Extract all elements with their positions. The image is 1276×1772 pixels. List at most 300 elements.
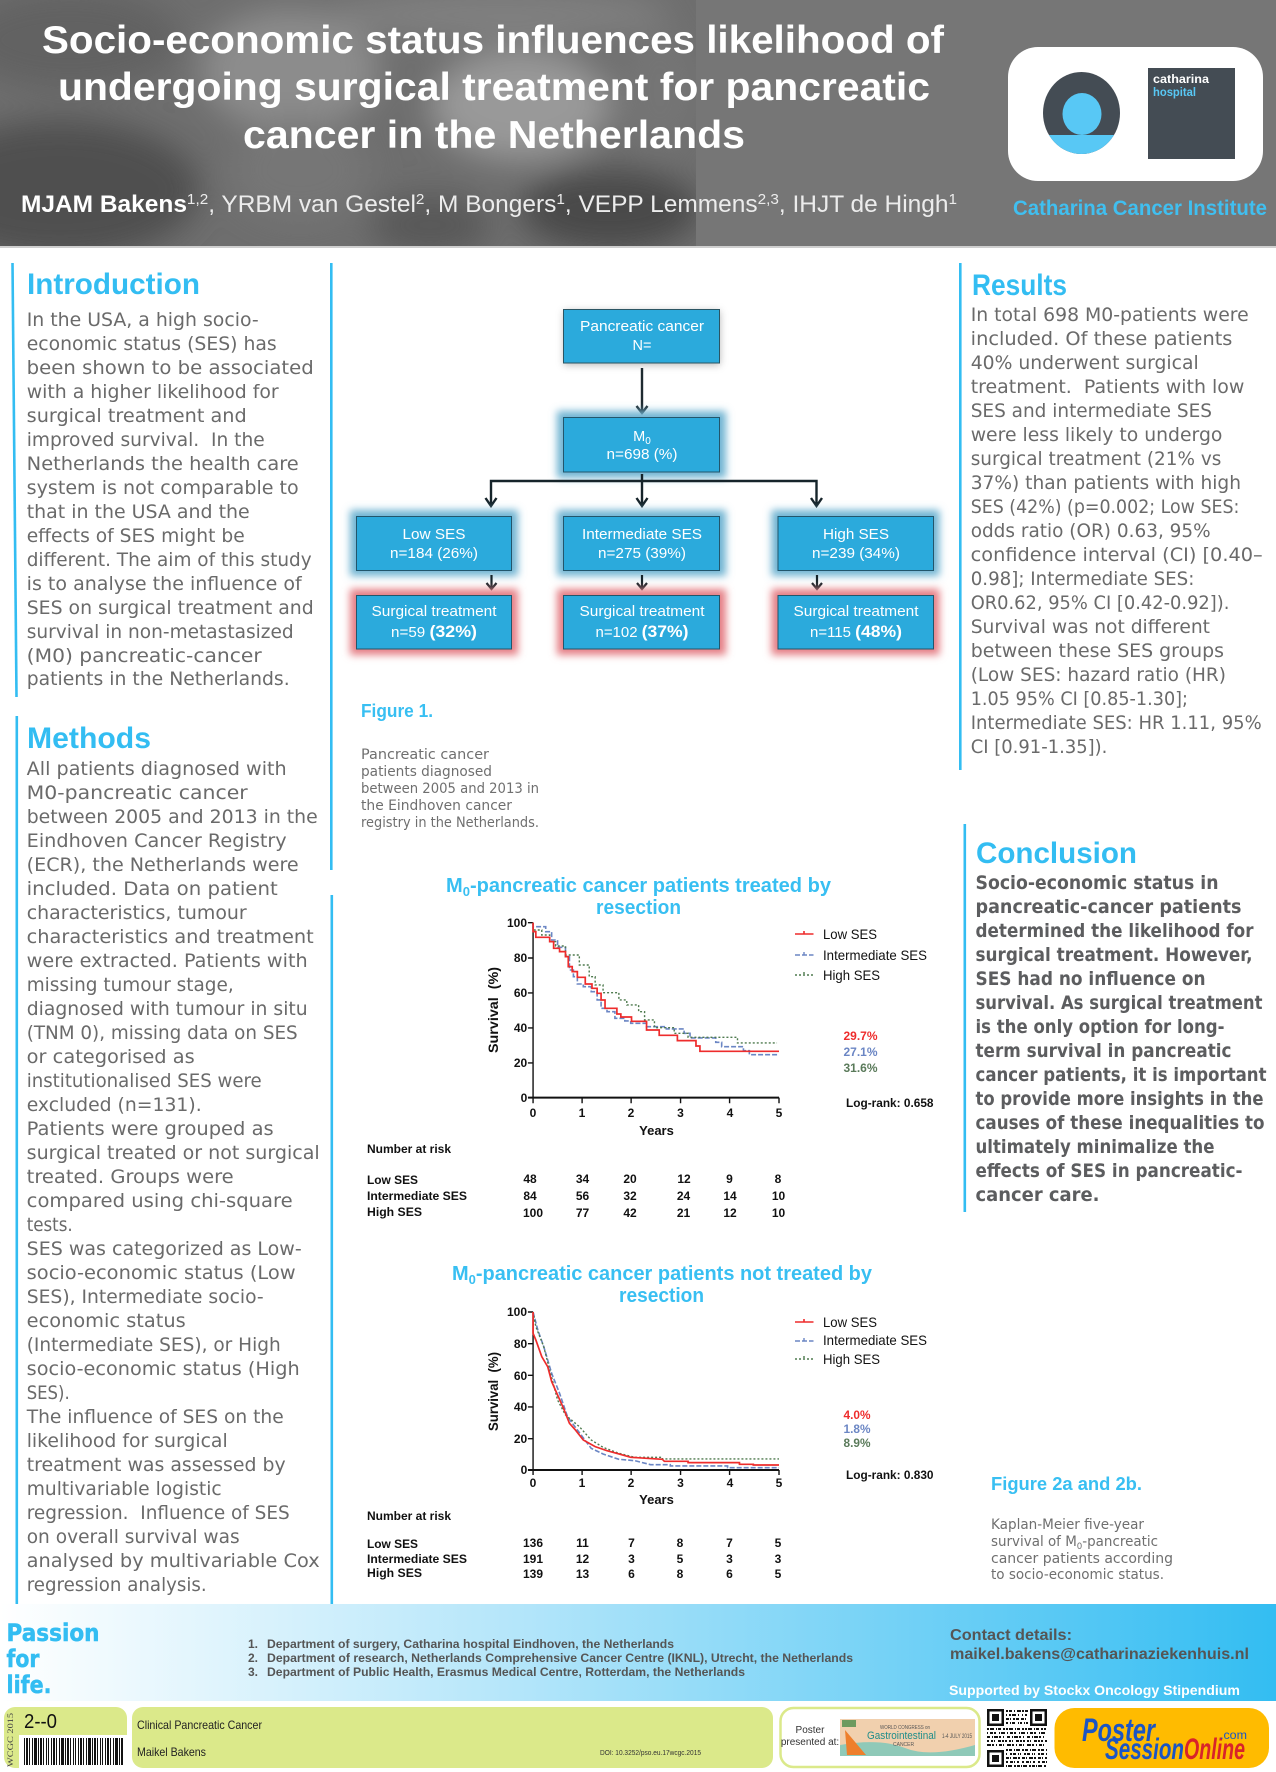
authors: , IHJT de Hingh <box>779 191 948 218</box>
text: methods body: were extracted. Patients with <box>27 950 308 972</box>
text: introduction body: SES on surgical treatment and <box>27 597 314 619</box>
QR code <box>985 1708 1048 1769</box>
number at risk table: 13 <box>576 1567 589 1581</box>
title: undergoing surgical treatment for pancreatic <box>58 66 930 109</box>
box: surgical intermediate SES: Surgical treatment <box>580 604 704 620</box>
text: results body: (Low SES: hazard ratio (HR) <box>971 664 1226 686</box>
poster presented at box: presented at: <box>781 1737 839 1748</box>
y axis labels: 60 <box>514 1369 527 1383</box>
text: introduction body: is to analyse the influence of <box>27 573 303 595</box>
text: methods body: characteristics and treatment <box>27 926 314 948</box>
number at risk table: 21 <box>677 1206 690 1220</box>
number at risk table: Number at risk <box>367 1509 451 1523</box>
box: low SES: n=184 (26%) <box>390 546 478 562</box>
text: introduction body: system is not comparable to <box>27 477 299 499</box>
contact details: maikel.bakens@catharinaziekenhuis.nl <box>950 1646 1249 1663</box>
box: intermediate SES: n=275 (39%) <box>598 546 686 562</box>
contact details: Contact details: <box>950 1627 1072 1644</box>
text: results body: OR0.62, 95% CI [0.42-0.92]). <box>971 592 1229 614</box>
text: results body: were less likely to undergo <box>971 424 1222 446</box>
slogan: life. <box>6 1671 52 1699</box>
text: conclusion body: is the only option for long- <box>976 1016 1224 1038</box>
x axis labels <box>530 1476 783 1507</box>
text: introduction body: In the USA, a high socio- <box>27 309 259 331</box>
poster details box: Maikel Bakens <box>137 1745 206 1759</box>
text: introduction body: that in the USA and the <box>27 501 250 523</box>
text: methods body: SES). <box>27 1382 70 1404</box>
x axis labels: Years <box>639 1492 674 1507</box>
congress banner <box>840 1719 975 1756</box>
sponsor line: Supported by Stockx Oncology Stipendium <box>949 1682 1240 1698</box>
number at risk table: 3 <box>726 1552 733 1566</box>
legend <box>795 1314 927 1367</box>
number at risk table: 8 <box>775 1172 782 1186</box>
text: introduction body: improved survival. In the <box>27 429 265 451</box>
box: pancreatic cancer: N= <box>633 338 651 354</box>
poster details box: Clinical Pancreatic Cancer <box>137 1718 262 1732</box>
text: methods body: treatment was assessed by <box>27 1454 286 1476</box>
y axis labels: 80 <box>514 951 527 965</box>
number at risk table <box>367 1509 782 1581</box>
heading: introduction: Introduction <box>27 268 200 301</box>
box: surgical intermediate SES <box>557 589 726 655</box>
PosterSessionOnline logo <box>1054 1708 1269 1768</box>
number at risk table: 12 <box>576 1552 589 1566</box>
axes and curves <box>528 1312 779 1475</box>
y axis labels: 60 <box>514 986 527 1000</box>
number at risk table: 84 <box>523 1189 537 1203</box>
text: results body: Survival was not different <box>971 616 1210 638</box>
box: pancreatic cancer <box>564 310 720 365</box>
box: surgical intermediate SES: n=102 (37%) <box>596 622 688 641</box>
title: Socio-economic status influences likelihood of <box>42 19 945 62</box>
y axis labels: 0 <box>521 1463 528 1477</box>
text: methods body: socio-economic status (Low <box>27 1262 296 1284</box>
box: surgical low SES: n=59 (32%) <box>391 622 477 641</box>
chart 2: survival not treated by resection <box>367 1263 934 1581</box>
x axis labels: 4 <box>727 1476 734 1490</box>
poster details box: DOI: 10.3252/pso.eu.17wcgc.2015 <box>600 1748 701 1757</box>
number at risk table: 14 <box>723 1189 737 1203</box>
chart title: resection <box>619 1285 704 1307</box>
caption: figure 1: Pancreatic cancer <box>361 747 489 763</box>
number at risk table: 48 <box>523 1172 537 1186</box>
box: M0 <box>557 411 726 478</box>
text: methods body: between 2005 and 2013 in the <box>27 806 318 828</box>
congress banner: WORLD CONGRESS on <box>880 1725 930 1731</box>
text: methods body: SES was categorized as Low- <box>27 1238 302 1260</box>
x axis labels <box>530 1106 783 1138</box>
caption: figure 1: Figure 1. <box>361 701 433 721</box>
affiliations: 3. <box>248 1665 258 1679</box>
number at risk table: 10 <box>772 1206 785 1220</box>
number at risk table: Low SES <box>367 1537 418 1551</box>
box: surgical low SES <box>350 589 518 655</box>
x axis labels: 3 <box>677 1476 684 1490</box>
text: methods body: regression analysis. <box>27 1574 207 1596</box>
affiliations <box>248 1637 853 1679</box>
legend: Intermediate SES <box>823 947 927 963</box>
panel: methods <box>16 716 320 1604</box>
y axis labels <box>485 916 528 1105</box>
footer band <box>0 1604 1276 1701</box>
chart title: M <box>452 1263 469 1285</box>
authors: , M Bongers <box>424 191 556 218</box>
x axis labels: 5 <box>776 1476 783 1490</box>
text: methods body: tests. <box>27 1214 73 1236</box>
caption: figure 2: Kaplan-Meier five-year <box>991 1517 1144 1533</box>
caption: figure 1: between 2005 and 2013 in <box>361 781 539 797</box>
text: methods body: diagnosed with tumour in situ <box>27 998 308 1020</box>
text: results body: 37%) than patients with high <box>971 472 1241 494</box>
poster presented at box: Poster <box>796 1725 825 1736</box>
PosterSessionOnline logo: Online <box>1184 1733 1245 1766</box>
number at risk table: High SES <box>367 1205 422 1219</box>
text: methods body: regression. Influence of SES <box>27 1502 290 1524</box>
heading: methods: Methods <box>27 722 151 755</box>
number at risk table: Number at risk <box>367 1142 451 1156</box>
number at risk table: 12 <box>723 1206 737 1220</box>
conference label: WCGC 2015 <box>5 1713 15 1767</box>
text: introduction body: different. The aim of this study <box>27 549 312 571</box>
authors: 1 <box>948 191 957 208</box>
text: methods body: included. Data on patient <box>27 878 278 900</box>
text: conclusion body: effects of SES in pancreatic- <box>976 1160 1242 1182</box>
chart 1: survival treated by resection <box>367 875 934 1220</box>
number at risk table: 5 <box>775 1567 782 1581</box>
text: results body: confidence interval (CI) [0.40– <box>971 544 1263 566</box>
text: results body: SES and intermediate SES <box>971 400 1212 422</box>
caption: figure 2: cancer patients according <box>991 1551 1173 1567</box>
text: results body: 1.05 95% CI [0.85-1.30]; <box>971 688 1188 710</box>
text: methods body: characteristics, tumour <box>27 902 247 924</box>
authors: 2,3 <box>758 191 779 208</box>
five-year survival percentages: 29.7% <box>844 1029 878 1043</box>
box: surgical high SES: n=115 (48%) <box>810 622 902 641</box>
number at risk table: 56 <box>576 1189 589 1203</box>
x axis labels: 0 <box>530 1476 537 1490</box>
x axis labels: 0 <box>530 1106 537 1120</box>
icon: logo mark <box>1043 72 1120 154</box>
box: low SES <box>350 510 518 576</box>
panel: conclusion <box>964 824 1266 1212</box>
x axis labels: 5 <box>776 1106 783 1120</box>
text: methods body: on overall survival was <box>27 1526 240 1548</box>
PosterSessionOnline logo: .com <box>1220 1728 1247 1742</box>
box: surgical low SES: Surgical treatment <box>372 604 496 620</box>
text: conclusion body: pancreatic-cancer patients <box>976 896 1242 918</box>
flowchart <box>350 310 940 655</box>
number at risk table: 6 <box>628 1567 635 1581</box>
text: results body: 0.98]; Intermediate SES: <box>971 568 1194 590</box>
congress banner: CANCER <box>893 1742 915 1748</box>
title <box>42 19 945 157</box>
chart title: -pancreatic cancer patients not treated by <box>476 1263 873 1285</box>
number at risk table: 100 <box>523 1206 543 1220</box>
contact details <box>950 1627 1249 1663</box>
y axis labels: Survival (%) <box>485 967 501 1053</box>
caption: figure 2: survival of M <box>991 1534 1080 1550</box>
text: conclusion body: ultimately minimalize the <box>976 1136 1214 1158</box>
legend: Low SES <box>823 1314 877 1330</box>
y axis labels: 40 <box>514 1400 527 1414</box>
text: methods body: treated. Groups were <box>27 1166 234 1188</box>
x axis labels: 2 <box>628 1106 635 1120</box>
heading: results: Results <box>972 269 1067 302</box>
authors: 1,2 <box>187 191 208 208</box>
caption: figure 2: -pancreatic <box>1082 1534 1158 1550</box>
slogan: Passion <box>6 1619 100 1647</box>
number at risk table: 8 <box>677 1536 684 1550</box>
affiliations: Department of Public Health, Erasmus Medical Centre, Rotterdam, the Netherlands <box>267 1665 745 1679</box>
number at risk table: 7 <box>726 1536 733 1550</box>
box: surgical high SES: Surgical treatment <box>794 604 918 620</box>
text: results body <box>971 304 1263 758</box>
authors: , YRBM van Gestel <box>208 191 416 218</box>
caption: figure 1: registry in the Netherlands. <box>361 815 539 831</box>
text: methods body: institutionalised SES were <box>27 1070 262 1092</box>
x axis labels: Years <box>639 1123 674 1138</box>
slogan: for <box>6 1645 40 1673</box>
PosterSessionOnline logo: Poster <box>1082 1712 1156 1748</box>
poster id box <box>4 1707 127 1768</box>
y axis labels: 100 <box>507 1305 527 1319</box>
text: methods body: compared using chi-square <box>27 1190 293 1212</box>
five-year survival percentages <box>844 1029 878 1075</box>
text: methods body: (ECR), the Netherlands were <box>27 854 299 876</box>
text: methods body <box>26 758 320 1596</box>
text: methods body: SES), Intermediate socio- <box>27 1286 264 1308</box>
caption: figure 2: Figure 2a and 2b. <box>991 1474 1142 1494</box>
number at risk table: 20 <box>623 1172 637 1186</box>
number at risk table: 10 <box>772 1189 785 1203</box>
text: methods body: missing tumour stage, <box>27 974 234 996</box>
authors: 1 <box>556 191 565 208</box>
text: introduction body: patients in the Netherlands. <box>27 668 290 690</box>
chart title <box>446 875 832 919</box>
text: results body: Intermediate SES: HR 1.11, 95% <box>971 712 1262 734</box>
number at risk table: 3 <box>628 1552 635 1566</box>
text: methods body: The influence of SES on the <box>26 1406 284 1428</box>
y axis labels: 0 <box>521 1091 528 1105</box>
logo wordmark block: catharina <box>1153 72 1209 86</box>
number at risk table: 42 <box>623 1206 637 1220</box>
text: methods body: M0-pancreatic cancer <box>27 782 248 804</box>
text: methods body: All patients diagnosed with <box>27 758 287 780</box>
text: conclusion body: Socio-economic status in <box>976 872 1218 894</box>
number at risk table: 5 <box>775 1536 782 1550</box>
number at risk table: 12 <box>677 1172 691 1186</box>
number at risk table: 139 <box>523 1567 543 1581</box>
box: M0: n=698 (%) <box>606 447 678 463</box>
number at risk table: High SES <box>367 1566 422 1580</box>
text: results body: between these SES groups <box>971 640 1224 662</box>
text: methods body: multivariable logistic <box>27 1478 222 1500</box>
affiliations: 1. <box>248 1637 258 1651</box>
slogan <box>6 1619 100 1699</box>
caption: figure 1: patients diagnosed <box>361 764 492 780</box>
y axis labels: 100 <box>507 916 527 930</box>
five-year survival percentages <box>844 1408 871 1450</box>
panel: results <box>959 263 1263 770</box>
text: results body: included. Of these patients <box>971 328 1232 350</box>
text: methods body: or categorised as <box>27 1046 195 1068</box>
text: introduction body: Netherlands the health care <box>27 453 299 475</box>
congress banner: Gastrointestinal <box>867 1730 936 1742</box>
number at risk table: 24 <box>677 1189 690 1203</box>
text: introduction body: economic status (SES) has <box>27 333 277 355</box>
box: high SES: High SES <box>823 527 889 543</box>
caption: figure 2: to socio-economic status. <box>991 1567 1164 1583</box>
logo wordmark block <box>1148 68 1235 159</box>
text: methods body: (TNM 0), missing data on SES <box>27 1022 298 1044</box>
text: conclusion body <box>976 872 1266 1206</box>
title: cancer in the Netherlands <box>243 114 745 157</box>
text: methods body: socio-economic status (High <box>27 1358 300 1380</box>
number at risk table: 77 <box>576 1206 589 1220</box>
legend: High SES <box>823 967 880 983</box>
chart title: 0 <box>463 884 470 899</box>
y axis labels: 40 <box>514 1021 527 1035</box>
five-year survival percentages: 8.9% <box>844 1436 871 1450</box>
x axis labels: 4 <box>727 1106 734 1120</box>
text: methods body: Patients were grouped as <box>27 1118 274 1140</box>
text: methods body: Eindhoven Cancer Registry <box>27 830 287 852</box>
box: M0: 0 <box>645 436 651 447</box>
text: introduction body: with a higher likelihood for <box>27 381 279 403</box>
arrows: branch to SES groups <box>486 474 822 506</box>
text: results body: SES (42%) (p=0.002; Low SES: <box>971 496 1239 518</box>
legend: High SES <box>823 1351 880 1367</box>
text: methods body: surgical treated or not surgical <box>27 1142 320 1164</box>
barcode <box>24 1738 124 1765</box>
x axis labels: 1 <box>579 1106 586 1120</box>
number at risk table: Intermediate SES <box>367 1552 467 1566</box>
arrows: to surgical treatment <box>486 575 822 589</box>
five-year survival percentages: 31.6% <box>844 1061 878 1075</box>
y axis labels <box>485 1305 528 1477</box>
text: methods body: excluded (n=131). <box>27 1094 202 1116</box>
text: introduction body <box>27 309 314 690</box>
poster presented at box <box>780 1708 980 1767</box>
text: introduction body: survival in non-metastasized <box>27 621 294 643</box>
five-year survival percentages: 4.0% <box>844 1408 871 1422</box>
PosterSessionOnline logo: Session <box>1105 1733 1184 1766</box>
hospital logo <box>1008 47 1263 181</box>
number at risk table: 32 <box>623 1189 637 1203</box>
affiliations: Department of surgery, Catharina hospital Eindhoven, the Netherlands <box>267 1637 674 1651</box>
number at risk table <box>367 1142 785 1220</box>
five-year survival percentages: 1.8% <box>844 1422 871 1436</box>
legend: Low SES <box>823 926 877 942</box>
arrow: to M0 <box>636 368 648 413</box>
box: pancreatic cancer: Pancreatic cancer <box>580 319 704 335</box>
text: methods body: analysed by multivariable Cox <box>27 1550 320 1572</box>
chart title: resection <box>596 897 681 919</box>
box: M0: M <box>633 429 645 445</box>
text: results body: CI [0.91-1.35]). <box>971 736 1107 758</box>
log-rank: Log-rank: 0.830 <box>846 1468 934 1482</box>
text: introduction body: (M0) pancreatic-cancer <box>27 645 262 667</box>
number at risk table: 11 <box>576 1536 589 1550</box>
poster details box <box>132 1707 773 1768</box>
logo wordmark block: hospital <box>1153 85 1196 99</box>
heading: conclusion: Conclusion <box>976 837 1137 870</box>
caption: figure 2 <box>991 1474 1173 1583</box>
affiliations: Department of research, Netherlands Comprehensive Cancer Centre (IKNL), Utrecht, the Netherlands <box>267 1651 853 1665</box>
text: conclusion body: SES had no influence on <box>976 968 1206 990</box>
box: high SES <box>772 510 940 576</box>
number at risk table: 5 <box>677 1552 684 1566</box>
text: results body: odds ratio (OR) 0.63, 95% <box>971 520 1211 542</box>
log-rank: Log-rank: 0.658 <box>846 1096 934 1110</box>
text: introduction body: effects of SES might be <box>27 525 245 547</box>
chart title: 0 <box>469 1272 476 1287</box>
legend: Intermediate SES <box>823 1332 927 1348</box>
authors: 2 <box>416 191 424 208</box>
text: results body: 40% underwent surgical <box>971 352 1199 374</box>
text: results body: In total 698 M0-patients were <box>971 304 1249 326</box>
y axis labels: 20 <box>514 1056 527 1070</box>
caption: figure 1: the Eindhoven cancer <box>361 798 512 814</box>
header background photo <box>0 0 700 260</box>
x axis labels: 1 <box>579 1476 586 1490</box>
affiliations: 2. <box>248 1651 258 1665</box>
institute name: Catharina Cancer Institute <box>1013 197 1267 220</box>
congress banner: 1-4 JULY 2015 <box>942 1734 972 1740</box>
authors: MJAM Bakens <box>21 191 187 218</box>
number at risk table: 6 <box>726 1567 733 1581</box>
text: results body: treatment. Patients with low <box>971 376 1244 398</box>
text: methods body: economic status <box>27 1310 186 1332</box>
text: results body: surgical treatment (21% vs <box>971 448 1221 470</box>
chart title <box>452 1263 873 1307</box>
x axis labels: 2 <box>628 1476 635 1490</box>
box: surgical high SES <box>772 589 940 655</box>
text: methods body: likelihood for surgical <box>27 1430 228 1452</box>
caption: figure 1 <box>361 701 539 831</box>
number at risk table: Low SES <box>367 1173 418 1187</box>
x axis labels: 3 <box>677 1106 684 1120</box>
text: introduction body: surgical treatment and <box>27 405 247 427</box>
number at risk table: Intermediate SES <box>367 1189 467 1203</box>
text: methods body: (Intermediate SES), or High <box>27 1334 281 1356</box>
header banner <box>0 0 1276 260</box>
number at risk table: 8 <box>677 1567 684 1581</box>
number at risk table: 34 <box>576 1172 589 1186</box>
number at risk table: 136 <box>523 1536 543 1550</box>
text: conclusion body: term survival in pancreatic <box>976 1040 1232 1062</box>
box: low SES: Low SES <box>402 527 466 543</box>
panel: introduction <box>12 263 314 697</box>
column divider lines <box>330 263 333 1604</box>
caption: figure 2: 0 <box>1077 1542 1083 1552</box>
y axis labels: Survival (%) <box>485 1352 501 1431</box>
number at risk table: 9 <box>726 1172 733 1186</box>
box: intermediate SES: Intermediate SES <box>582 527 702 543</box>
y axis labels: 80 <box>514 1337 527 1351</box>
text: conclusion body: cancer care. <box>976 1184 1100 1206</box>
legend <box>795 926 927 983</box>
box: high SES: n=239 (34%) <box>812 546 900 562</box>
axes and curves <box>528 923 779 1103</box>
poster number: 2--0 <box>24 1711 57 1733</box>
number at risk table: 191 <box>523 1552 543 1566</box>
number at risk table: 7 <box>628 1536 635 1550</box>
box: intermediate SES <box>557 510 726 576</box>
chart title: -pancreatic cancer patients treated by <box>470 875 832 897</box>
text: introduction body: been shown to be associated <box>27 357 314 379</box>
